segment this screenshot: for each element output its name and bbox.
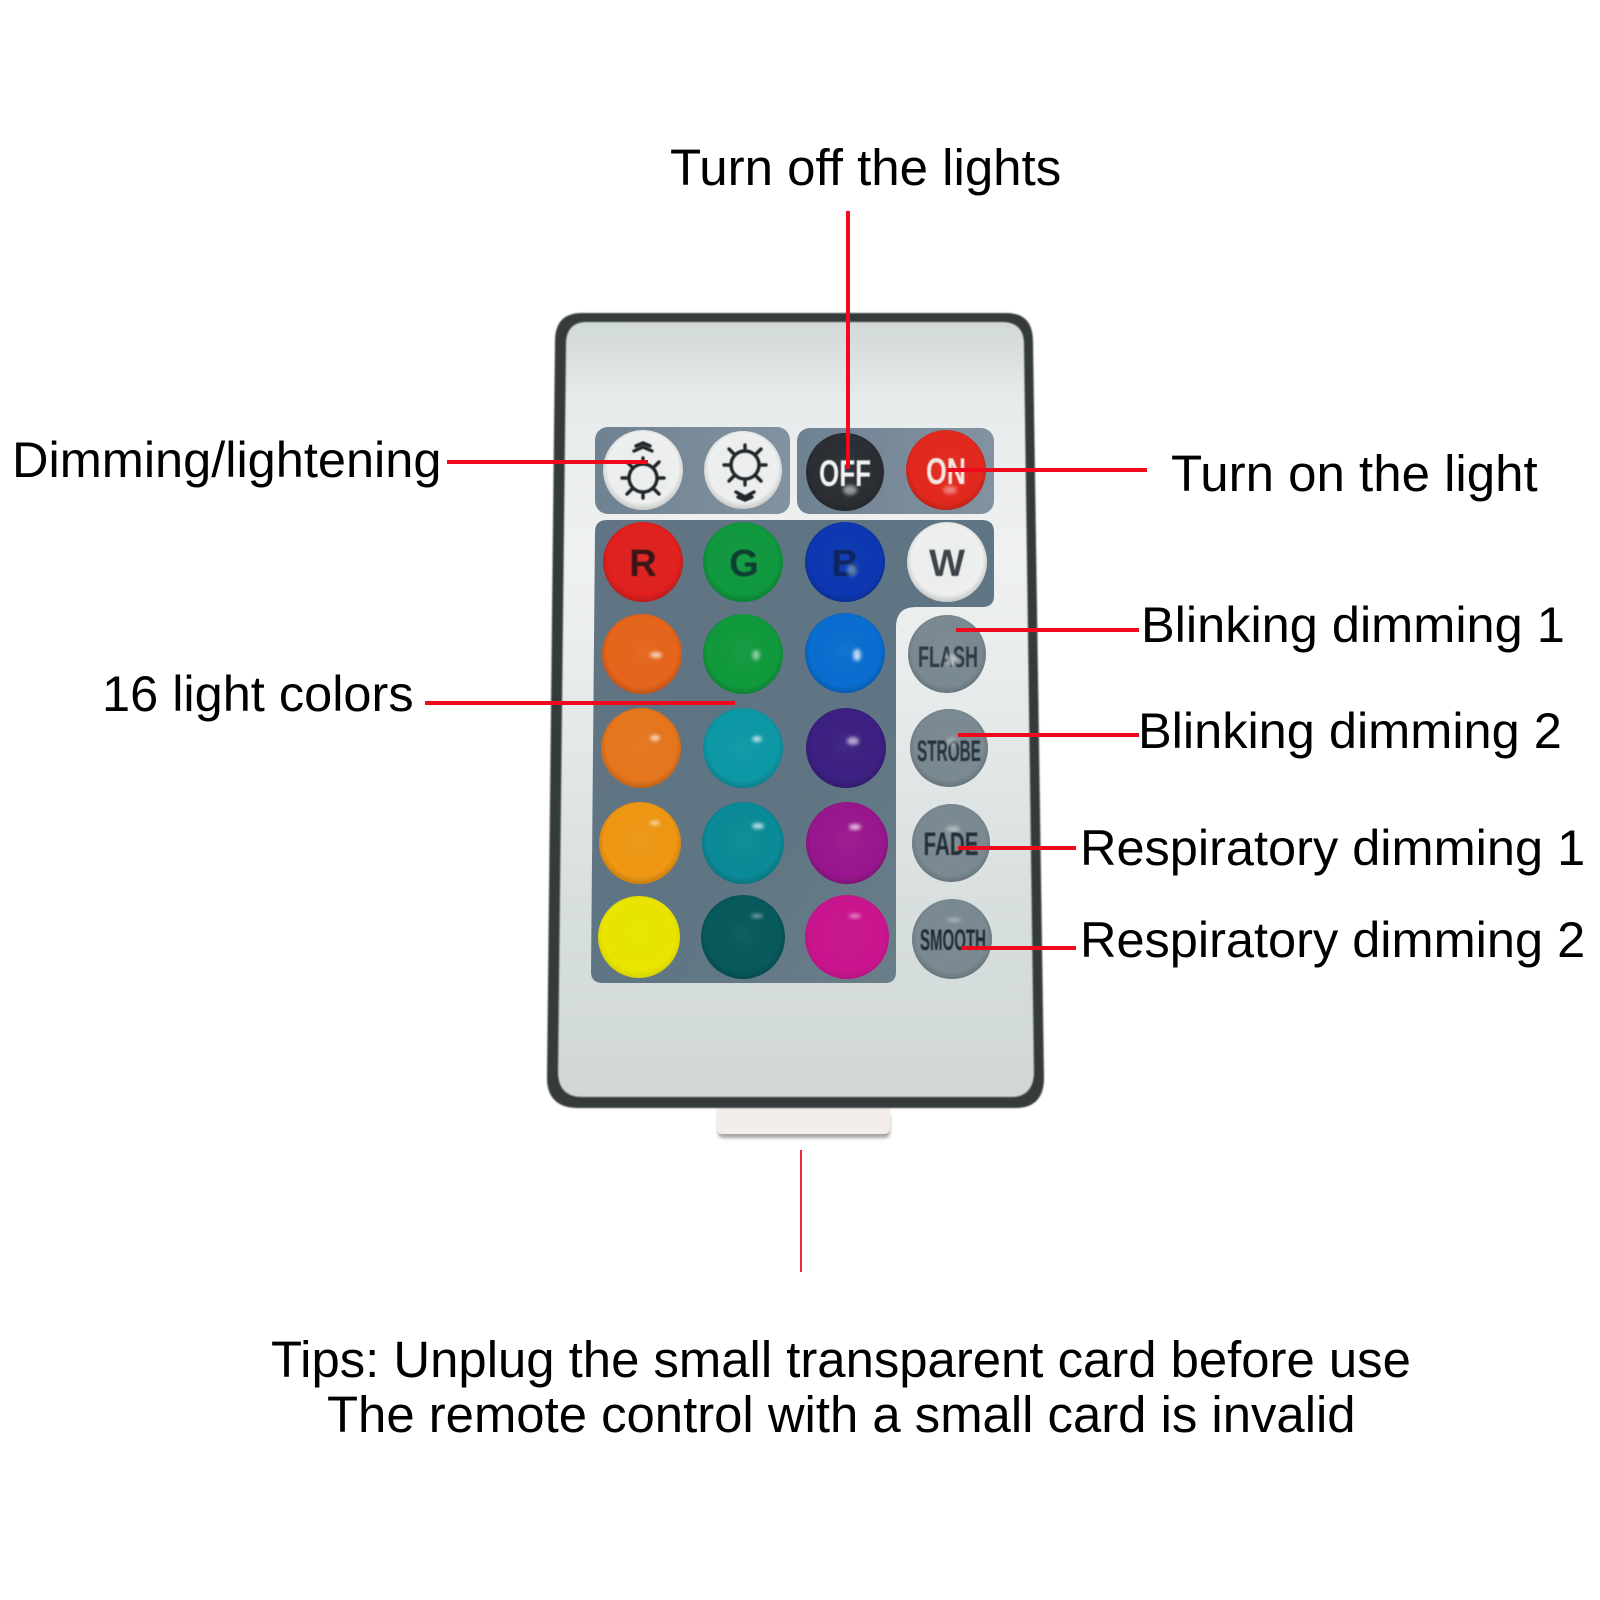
button: dim bbox=[603, 430, 683, 510]
button: OFF: OFF bbox=[819, 453, 871, 494]
small transparent card bbox=[716, 1104, 890, 1138]
remote face bbox=[558, 322, 1034, 1097]
leader line: card bbox=[800, 1150, 802, 1272]
button: ON: ON bbox=[926, 451, 966, 492]
leader line: blinking 2 bbox=[958, 733, 1139, 737]
button: W bbox=[907, 522, 987, 602]
button: B: B bbox=[831, 543, 859, 585]
remote control bbox=[547, 313, 1044, 1108]
label: respiratory 2: Respiratory dimming 2 bbox=[1080, 911, 1585, 968]
button: ON bbox=[906, 430, 986, 510]
label: colours: 16 light colors bbox=[102, 665, 414, 722]
panel: power keys bbox=[797, 428, 994, 514]
label: turn off: Turn off the lights bbox=[670, 139, 1061, 196]
button: B bbox=[805, 522, 885, 602]
panel: colour keys bbox=[591, 520, 994, 983]
tips text bbox=[271, 1331, 1411, 1443]
leader line: respiratory 2 bbox=[961, 946, 1076, 950]
colour buttons bbox=[598, 613, 889, 979]
label: respiratory 1: Respiratory dimming 1 bbox=[1080, 819, 1585, 876]
leader line: turn on bbox=[947, 468, 1147, 472]
button: R bbox=[603, 522, 683, 602]
button: OFF bbox=[806, 433, 884, 511]
panel: brightness keys bbox=[595, 427, 790, 514]
label: blinking 1: Blinking dimming 1 bbox=[1141, 596, 1565, 653]
button: SMOOTH bbox=[912, 899, 992, 979]
button: STROBE: STROBE bbox=[917, 735, 981, 768]
button: SMOOTH: SMOOTH bbox=[920, 924, 986, 957]
button: G: G bbox=[729, 543, 759, 585]
button: R: R bbox=[629, 543, 657, 585]
leader line: colours bbox=[425, 701, 735, 705]
button: STROBE bbox=[910, 709, 988, 787]
button: W: W bbox=[929, 543, 965, 585]
tips text: Tips: Unplug the small transparent card before use bbox=[271, 1331, 1411, 1388]
button: FLASH: FLASH bbox=[918, 641, 978, 674]
button: FADE: FADE bbox=[924, 826, 978, 862]
leader line: blinking 1 bbox=[956, 628, 1139, 632]
label: dimming: Dimming/lightening bbox=[12, 431, 441, 488]
button: brighten bbox=[704, 431, 782, 509]
button: FLASH bbox=[908, 615, 986, 693]
leader line: turn off bbox=[846, 211, 850, 469]
label: blinking 2: Blinking dimming 2 bbox=[1138, 702, 1562, 759]
label: turn on: Turn on the light bbox=[1171, 445, 1538, 502]
icon: dim sun bbox=[622, 443, 664, 498]
remote body frame bbox=[547, 313, 1044, 1108]
leader line: dimming bbox=[447, 460, 648, 464]
icon: bright sun bbox=[724, 445, 766, 500]
button: G bbox=[703, 522, 783, 602]
tips text: The remote control with a small card is invalid bbox=[327, 1386, 1356, 1443]
leader line: respiratory 1 bbox=[958, 846, 1076, 850]
button: FADE bbox=[912, 804, 990, 882]
